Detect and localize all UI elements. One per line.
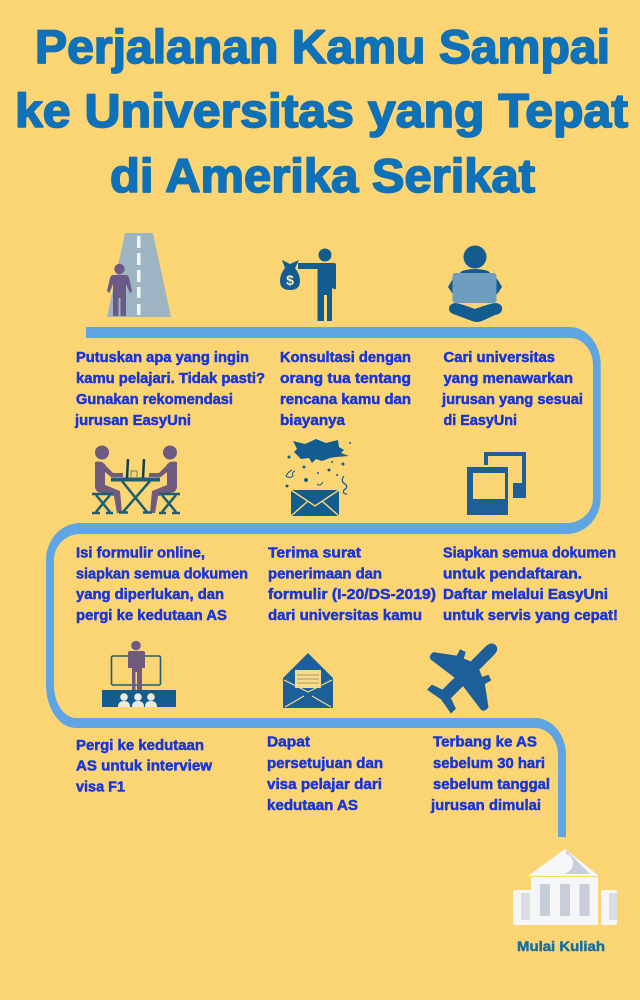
icon: person with laptop — [448, 246, 502, 322]
text: step 5: Terima surat — [268, 546, 361, 562]
text: step 8: persetujuan dan — [267, 756, 383, 772]
text: step 2: orang tua tentang — [280, 371, 411, 387]
text: step 8 — [267, 734, 383, 814]
text: step 7: visa F1 — [76, 780, 125, 796]
step 1: decide — [74, 233, 265, 429]
text: step 3: jurusan yang sesuai — [441, 392, 583, 408]
title: ke Universitas yang Tepat — [15, 84, 628, 137]
text: step 4: yang diperlukan, dan — [76, 587, 224, 603]
text: step 8: visa pelajar dari — [267, 777, 382, 793]
text: step 5: formulir (I-20/DS-2019) — [268, 587, 436, 603]
text: step 3 — [441, 350, 583, 429]
text: step 6: untuk pendaftaran. — [443, 566, 582, 582]
winding journey path — [46, 327, 601, 837]
text: step 6: Daftar melalui EasyUni — [443, 587, 608, 603]
icon: university building — [513, 849, 617, 925]
text: step 4: Isi formulir online, — [76, 546, 205, 562]
text: step 5: dari universitas kamu — [268, 608, 422, 624]
text: step 1: Putuskan apa yang ingin — [76, 350, 249, 366]
icon: presenter with audience — [102, 641, 176, 707]
text: step 7 — [76, 738, 213, 796]
icon: two people at table with laptops — [92, 446, 180, 513]
step 9: fly to the US — [411, 617, 550, 814]
text: step 8: kedutaan AS — [267, 798, 358, 814]
text: step 2 — [280, 350, 411, 429]
label: Mulai Kuliah: Mulai Kuliah — [517, 938, 605, 954]
icon: road with person — [107, 233, 171, 317]
step 3: find universities — [441, 246, 583, 429]
title: di Amerika Serikat — [110, 149, 535, 202]
text: step 3: Cari universitas — [444, 350, 555, 366]
text: step 5 — [268, 546, 436, 624]
destination: start college — [513, 849, 617, 954]
text: step 9: sebelum tanggal — [433, 777, 550, 793]
text: step 1: Gunakan rekomendasi — [76, 392, 233, 408]
icon: stacked photos — [467, 452, 526, 515]
text: step 1: jurusan EasyUni — [74, 413, 191, 429]
text: step 6 — [443, 546, 618, 624]
text: step 2: rencana kamu dan — [280, 392, 411, 408]
text: step 1 — [74, 350, 265, 429]
text: step 2: biayanya — [280, 413, 346, 429]
text: step 5: penerimaan dan — [268, 566, 382, 582]
text: step 3: yang menawarkan — [444, 371, 573, 387]
title: Perjalanan Kamu Sampai — [35, 20, 610, 73]
step 5: acceptance letter — [268, 439, 436, 624]
icon: man holding money bag: $ — [286, 272, 294, 288]
text: step 9: Terbang ke AS — [433, 734, 537, 750]
text: step 6: Siapkan semua dokumen — [443, 546, 616, 562]
icon: envelope with burst — [286, 439, 351, 516]
text: step 4: pergi ke kedutaan AS — [76, 608, 227, 624]
step 2: consult parents — [280, 248, 411, 429]
step 7: visa interview — [76, 641, 213, 796]
text: step 9: jurusan dimulai — [430, 798, 541, 814]
text: step 1: kamu pelajari. Tidak pasti? — [76, 371, 265, 387]
text: step 7: AS untuk interview — [76, 758, 213, 774]
text: step 9: sebelum 30 hari — [433, 756, 545, 772]
step 6: prepare documents — [443, 452, 618, 624]
text: step 3: di EasyUni — [444, 413, 517, 429]
step 8: visa approval — [267, 653, 383, 814]
icon: airplane — [411, 617, 523, 729]
text: step 6: untuk servis yang cepat! — [443, 608, 618, 624]
text: step 4: siapkan semua dokumen — [76, 566, 248, 582]
text: step 8: Dapat — [267, 734, 310, 750]
step 4: online form — [76, 446, 248, 624]
title — [15, 20, 628, 202]
text: step 2: Konsultasi dengan — [280, 350, 411, 366]
icon: open envelope with letter — [283, 653, 333, 708]
icon: man holding money bag — [280, 248, 336, 321]
text: step 9 — [430, 734, 550, 814]
text: step 7: Pergi ke kedutaan — [76, 738, 204, 754]
text: step 4 — [76, 546, 248, 624]
